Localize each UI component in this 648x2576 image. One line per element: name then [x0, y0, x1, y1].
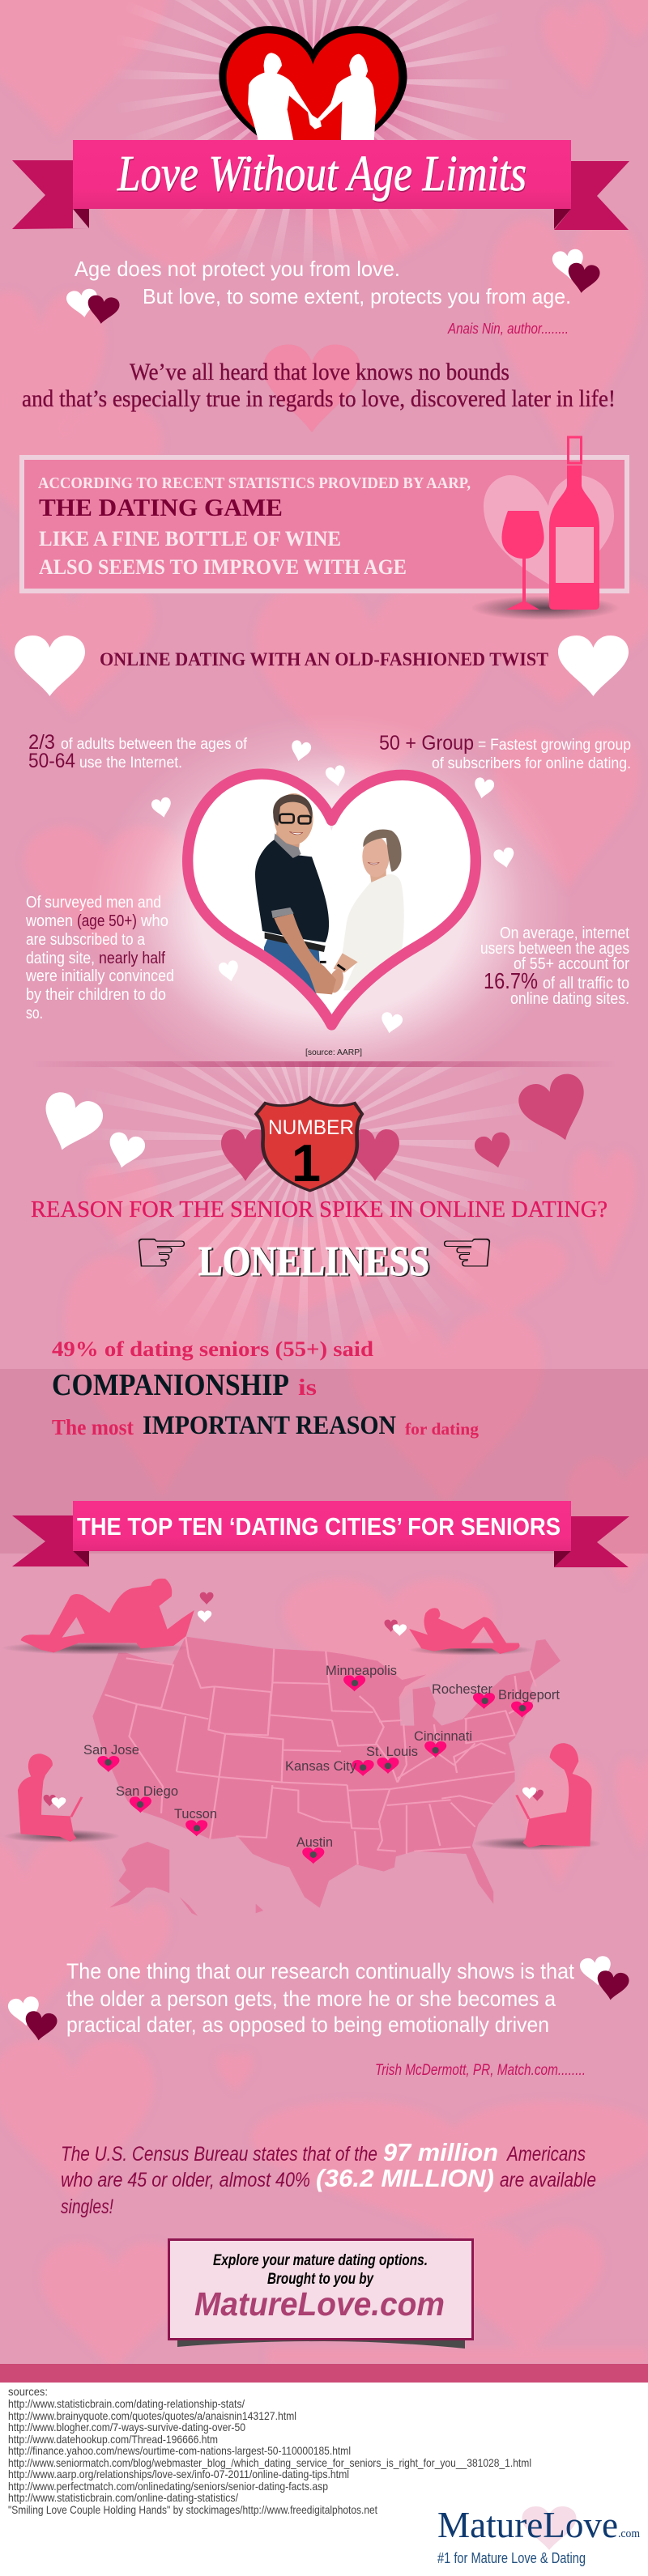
icon: number 1 shield: 1	[292, 1133, 321, 1192]
city markers	[97, 1675, 533, 1864]
stat: companionship: is	[298, 1375, 317, 1401]
stat: 16.7 percent of traffic: On average, internet	[500, 925, 629, 942]
panel: dating game statistic: ACCORDING TO RECENT STATISTICS PROVIDED BY AARP,	[38, 474, 471, 492]
stat: 16.7 percent of traffic: users between the ages	[480, 940, 629, 958]
icon: wine bottle and glass	[471, 437, 620, 620]
pink footer band	[0, 2364, 648, 2383]
city labels: St. Louis	[366, 1744, 418, 1759]
stat: nearly half convinced by children: are subscribed to a	[26, 931, 146, 949]
icon: number 1 shield	[221, 1098, 399, 1192]
icon: heart pair left	[66, 288, 121, 326]
stat: nearly half convinced by children: women	[25, 912, 73, 930]
city labels: Kansas City	[285, 1758, 356, 1774]
stat: nearly half convinced by children: nearly half	[99, 950, 165, 967]
sources list: http://www.datehookup.com/Thread-196666.htm	[8, 2433, 218, 2446]
photo: senior couple in heart	[188, 774, 475, 1025]
small floating hearts	[151, 739, 517, 1035]
heading: loneliness with pointing hands	[133, 1218, 496, 1287]
stat: fastest growing group: of subscribers for online dating.	[432, 755, 631, 772]
title ribbon: Love Without Age Limits	[117, 148, 527, 203]
panel: dating game statistic: ALSO SEEMS TO IMPROVE WITH AGE	[39, 555, 407, 579]
sources list: http://www.seniormatch.com/blog/webmaster_blog_/which_dating_service_for_seniors_is_right_for_you__381028_1.html	[8, 2456, 531, 2469]
title ribbon	[12, 140, 629, 230]
quote: Trish McDermott: the older a person gets, the more he or she becomes a	[66, 1987, 556, 2011]
source note: [source: AARP]	[305, 1048, 362, 1057]
sources list: http://www.statisticbrain.com/online-dating-statistics/	[8, 2491, 238, 2504]
callout: explore MatureLove.com: Brought to you by	[267, 2271, 374, 2288]
sources list: http://www.statisticbrain.com/dating-relationship-stats/	[8, 2397, 245, 2410]
logo: MatureLove.com: .com	[618, 2527, 640, 2540]
stat: companionship: IMPORTANT REASON	[143, 1411, 396, 1440]
callout: explore MatureLove.com	[168, 2239, 473, 2349]
panel: dating game statistic	[22, 457, 627, 591]
decorative hearts around shield	[34, 1069, 597, 1172]
stat: fastest growing group: 50 + Group	[379, 732, 474, 755]
stat: nearly half convinced by children: who	[140, 912, 168, 930]
callout: explore MatureLove.com: Explore your mature dating options.	[213, 2252, 428, 2269]
stat: companionship	[52, 1337, 480, 1440]
cities ribbon: THE TOP TEN ‘DATING CITIES’ FOR SENIORS	[77, 1512, 561, 1541]
stat: companionship: The most	[52, 1415, 134, 1439]
sources list: sources:	[8, 2385, 48, 2398]
stat: fastest growing group	[379, 732, 631, 772]
sources list: http://www.blogher.com/7-ways-survive-dating-over-50	[8, 2421, 245, 2434]
sources list: http://www.brainyquote.com/quotes/quotes/a/anaisnin143127.html	[8, 2409, 296, 2422]
stat: nearly half convinced by children: (age 50+)	[77, 912, 137, 930]
silhouette: reclining person with laptop right	[384, 1608, 533, 1656]
stat: 16.7 percent of traffic: online dating sites.	[510, 990, 629, 1008]
stat: two thirds of adults: 2/3	[28, 731, 55, 754]
sources list: http://www.perfectmatch.com/onlinedating/seniors/senior-dating-facts.asp	[8, 2480, 328, 2493]
icon: heart pair right quote	[579, 1955, 630, 2002]
stat: nearly half convinced by children	[25, 894, 174, 1022]
intro statement: We’ve all heard that love knows no bounds	[130, 359, 509, 385]
city labels: Rochester	[432, 1681, 492, 1697]
woman	[326, 830, 404, 994]
panel: dating game statistic: LIKE A FINE BOTTLE OF WINE	[39, 527, 341, 550]
quote: Anais Nin: Age does not protect you from love.	[75, 257, 400, 281]
silhouette: sitting person with laptop left	[4, 1753, 120, 1843]
map: United States	[92, 1637, 561, 1916]
stat: nearly half convinced by children: so.	[26, 1005, 43, 1022]
sources list: "Smiling Love Couple Holding Hands" by stockimages/http://www.freedigitalphotos.net	[8, 2503, 377, 2516]
city labels: Bridgeport	[498, 1687, 560, 1702]
city labels: Cincinnati	[414, 1728, 472, 1744]
silhouette: reclining man with laptop left	[2, 1579, 214, 1655]
icon: red heart with couple silhouette	[219, 26, 407, 170]
stat: nearly half convinced by children: dating site,	[26, 950, 95, 967]
stat: nearly half convinced by children: by their children to do	[26, 986, 166, 1004]
callout: explore MatureLove.com: MatureLove.com	[194, 2285, 445, 2323]
stat: two thirds of adults	[28, 731, 248, 772]
stat: two thirds of adults: use the Internet.	[79, 755, 182, 772]
logo: MatureLove.com	[437, 2504, 640, 2566]
stat: census bureau singles: singles!	[61, 2196, 113, 2218]
divider shadow and second sunburst	[32, 1022, 616, 1257]
city labels: Tucson	[174, 1806, 217, 1821]
city labels: San Diego	[116, 1783, 178, 1799]
heading: reason for senior spike: REASON FOR THE SENIOR SPIKE IN ONLINE DATING?	[31, 1197, 608, 1222]
panel: dating game statistic: THE DATING GAME	[39, 493, 283, 521]
stat: two thirds of adults: of adults between the ages of	[61, 736, 248, 753]
icon: number 1 shield: NUMBER	[268, 1116, 354, 1139]
city labels	[83, 1663, 560, 1850]
quote: Trish McDermott: practical dater, as opposed to being emotionally driven	[66, 2013, 549, 2037]
title ribbon: Love Without Age Limits	[117, 147, 526, 202]
quote: Trish McDermott: Trish McDermott, PR, Match.com........	[375, 2062, 586, 2079]
stat: nearly half convinced by children: were initially convinced	[25, 967, 174, 985]
stat: two thirds of adults: 50-64	[28, 750, 75, 772]
man	[255, 793, 336, 996]
sources list	[8, 2385, 531, 2516]
logo: MatureLove.com: #1 for Mature Love & Dating	[437, 2550, 586, 2566]
city labels: Minneapolis	[326, 1663, 397, 1678]
top sunburst	[159, 0, 467, 253]
white glow behind photo	[88, 712, 574, 1101]
stat: 16.7 percent of traffic: 16.7%	[484, 968, 538, 993]
quote: Anais Nin: Anais Nin, author........	[447, 321, 569, 337]
stat: census bureau singles	[61, 2138, 596, 2218]
city labels: Austin	[296, 1834, 333, 1850]
white footer background	[0, 2383, 648, 2576]
silhouette: sitting person with laptop right	[473, 1743, 601, 1850]
heading: loneliness with pointing hands: LONELINESS	[200, 1239, 431, 1286]
stat: census bureau singles: are available	[500, 2169, 596, 2191]
stat: 16.7 percent of traffic: of 55+ account for	[514, 955, 629, 973]
quote: Anais Nin	[75, 257, 571, 337]
quote: Trish McDermott	[66, 1959, 586, 2079]
heading: loneliness with pointing hands: LONELINESS	[198, 1239, 429, 1285]
stat: fastest growing group: = Fastest growing group	[478, 737, 631, 754]
heading: loneliness with pointing hands: ☞	[133, 1218, 190, 1287]
sources list: http://www.aarp.org/relationships/love-sex/info-07-2011/online-dating-tips.html	[8, 2468, 349, 2480]
center pale heart behind text	[263, 345, 360, 432]
stat: nearly half convinced by children: Of surveyed men and	[26, 894, 161, 912]
heading: online dating with hearts: ONLINE DATING WITH AN OLD-FASHIONED TWIST	[100, 649, 548, 670]
stat: 16.7 percent of traffic: of all traffic to	[543, 975, 629, 993]
icon: heart pair left quote	[7, 1996, 58, 2043]
stat: census bureau singles: 97 million	[383, 2138, 498, 2166]
stat: census bureau singles: who are 45 or older, almost 40%	[61, 2169, 310, 2191]
quote: Anais Nin: But love, to some extent, protects you from age.	[143, 284, 571, 308]
heading: online dating with hearts	[15, 635, 629, 696]
heading: loneliness with pointing hands: ☜	[438, 1218, 496, 1287]
stat: companionship: COMPANIONSHIP	[52, 1368, 289, 1402]
logo: MatureLove.com: MatureLove	[437, 2504, 618, 2545]
stat: census bureau singles: The U.S. Census Bureau states that of the	[61, 2143, 377, 2166]
quote: Trish McDermott: The one thing that our research continually shows is that	[66, 1959, 574, 1983]
stat: 16.7 percent of traffic	[480, 925, 629, 1008]
city labels: San Jose	[83, 1742, 139, 1758]
sources list: http://finance.yahoo.com/news/ourtime-com-nations-largest-50-110000185.html	[8, 2444, 351, 2457]
intro statement	[22, 359, 616, 412]
stat: companionship: 49% of dating seniors (55+) said	[52, 1337, 374, 1361]
icon: heart pair right	[552, 249, 601, 295]
stat: census bureau singles: (36.2 MILLION)	[316, 2164, 494, 2192]
cities ribbon	[12, 1501, 629, 1567]
stat: census bureau singles: Americans	[505, 2143, 586, 2166]
stat: companionship: for dating	[405, 1419, 480, 1439]
